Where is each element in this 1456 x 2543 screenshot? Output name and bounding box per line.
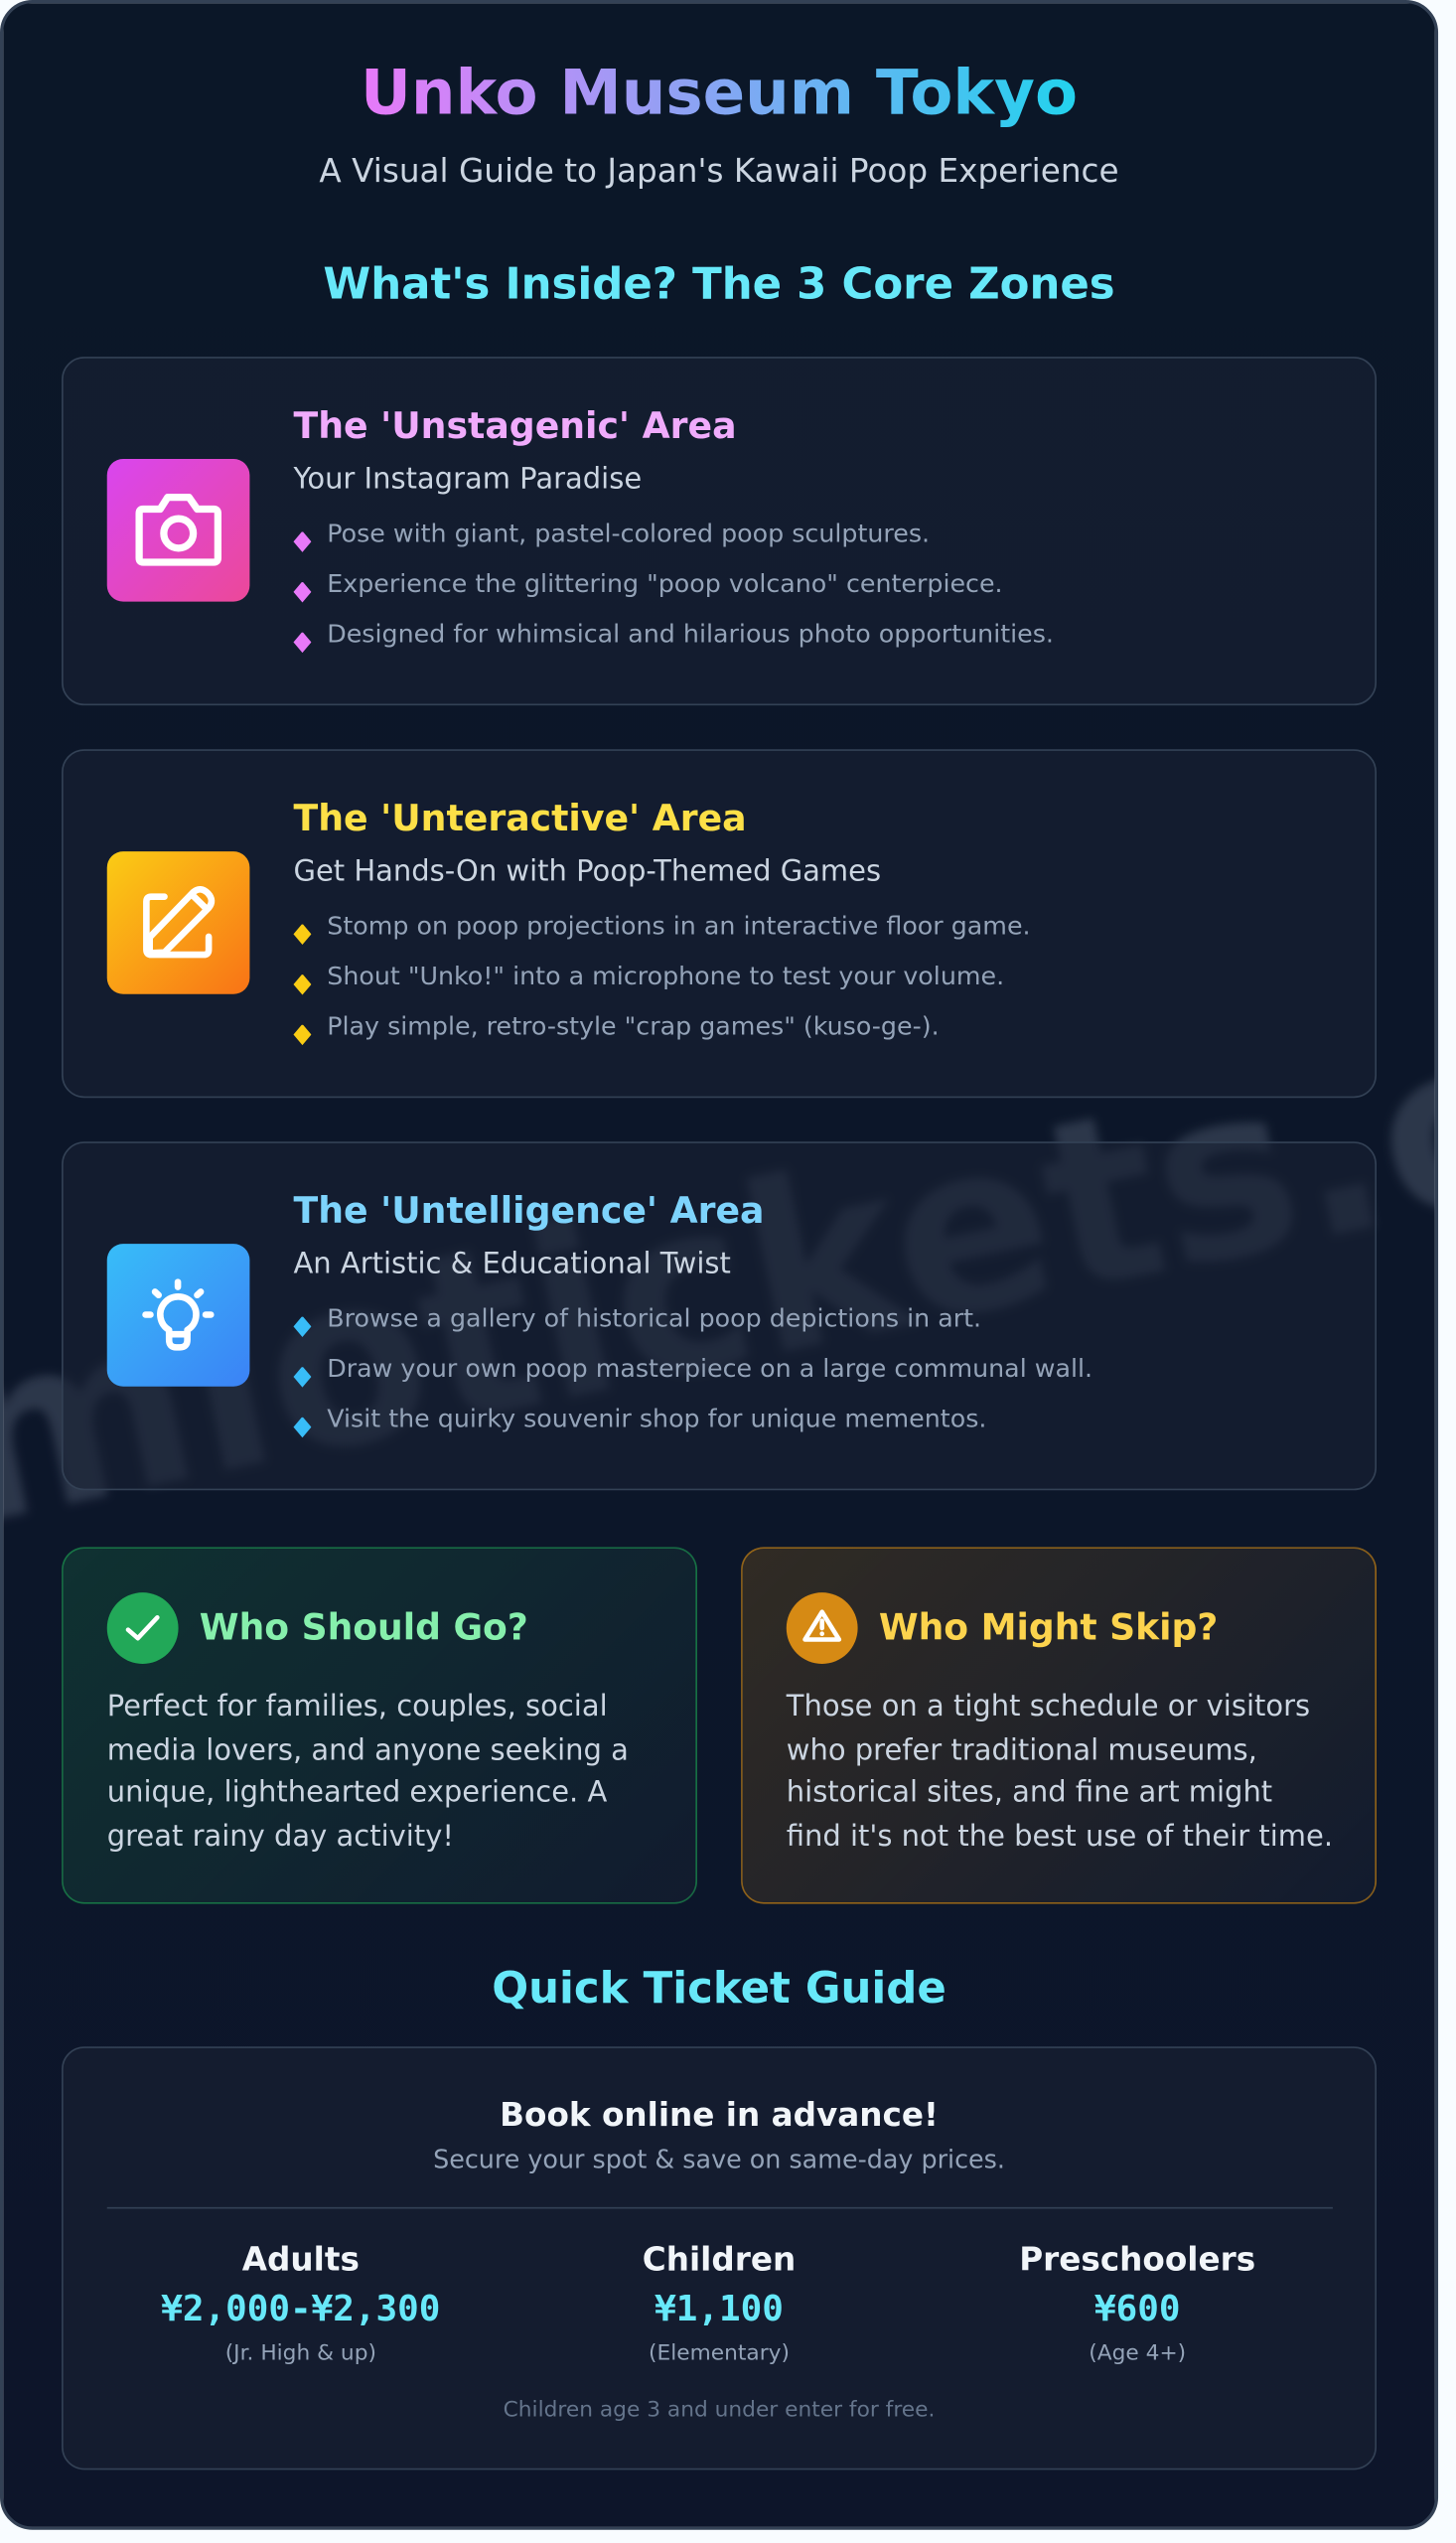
body text: historical sites, and fine art might <box>787 1778 1272 1810</box>
price: children <box>643 2240 796 2366</box>
subheading: An Artistic & Educational Twist <box>293 1249 731 1281</box>
price: children: ¥1,100 <box>655 2290 784 2330</box>
panel: Unstagenic area <box>62 357 1377 705</box>
panel: who might skip <box>741 1547 1377 1904</box>
price: preschoolers: ¥600 <box>1094 2290 1180 2330</box>
price: adults: Adults <box>242 2240 360 2279</box>
subtitle: A Visual Guide to Japan's Kawaii Poop Experience <box>319 151 1119 190</box>
bullet: Designed for whimsical and hilarious photo opportunities. <box>327 619 1054 648</box>
icon: camera <box>107 459 249 602</box>
bullet: Shout "Unko!" into a microphone to test your volume. <box>327 961 1004 990</box>
body text: great rainy day activity! <box>107 1821 454 1854</box>
heading: Who Should Go? <box>200 1607 528 1650</box>
bullet: Draw your own poop masterpiece on a large communal wall. <box>327 1353 1092 1383</box>
bullet: Pose with giant, pastel-colored poop sculptures. <box>327 519 930 547</box>
body text: Those on a tight schedule or visitors <box>787 1692 1310 1723</box>
body text: unique, lighthearted experience. A <box>107 1778 607 1810</box>
price: preschoolers: (Age 4+) <box>1089 2341 1186 2366</box>
booking heading: Book online in advance! <box>500 2094 939 2134</box>
footnote: Children age 3 and under enter for free. <box>504 2398 935 2423</box>
body text <box>787 1692 1333 1854</box>
title: Unko Museum Tokyo <box>361 57 1078 130</box>
panel: who should go <box>62 1547 697 1904</box>
price: children: Children <box>643 2240 796 2279</box>
price: adults: (Jr. High & up) <box>225 2341 376 2366</box>
bullet: Visit the quirky souvenir shop for unique mementos. <box>327 1404 986 1432</box>
bullet: Experience the glittering "poop volcano" centerpiece. <box>327 568 1003 598</box>
icon: pencil <box>107 851 249 994</box>
panel: Unteractive area <box>62 749 1377 1098</box>
price: adults: ¥2,000-¥2,300 <box>161 2290 440 2330</box>
heading: Who Might Skip? <box>879 1607 1218 1650</box>
section heading: zones: What's Inside? The 3 Core Zones <box>323 259 1115 309</box>
body text: find it's not the best use of their time. <box>787 1821 1333 1854</box>
bullet: Browse a gallery of historical poop depictions in art. <box>327 1303 981 1332</box>
price: preschoolers: Preschoolers <box>1019 2240 1255 2279</box>
icon: warning <box>787 1592 858 1664</box>
price: children: (Elementary) <box>649 2341 790 2366</box>
price: preschoolers <box>1019 2240 1255 2366</box>
subheading: Get Hands-On with Poop-Themed Games <box>293 856 881 889</box>
price: adults <box>161 2240 440 2366</box>
divider <box>107 2207 1333 2208</box>
body text: Perfect for families, couples, social <box>107 1692 608 1723</box>
body text: media lovers, and anyone seeking a <box>107 1734 629 1767</box>
heading: The 'Unteractive' Area <box>293 799 747 840</box>
panel: ticket guide <box>62 2046 1377 2469</box>
section heading: tickets: Quick Ticket Guide <box>492 1963 946 2014</box>
panel: Untelligence area <box>62 1141 1377 1490</box>
heading: The 'Untelligence' Area <box>293 1191 765 1233</box>
icon: check <box>107 1592 179 1664</box>
body text <box>107 1692 629 1854</box>
body text: who prefer traditional museums, <box>787 1734 1257 1767</box>
bullet: Play simple, retro-style "crap games" (kuso-ge-). <box>327 1011 940 1040</box>
icon: light bulb <box>107 1244 249 1387</box>
bullet: Stomp on poop projections in an interactive floor game. <box>327 911 1031 940</box>
heading: The 'Unstagenic' Area <box>293 406 737 448</box>
booking note: Secure your spot & save on same-day prices. <box>433 2145 1005 2173</box>
subheading: Your Instagram Paradise <box>293 464 642 497</box>
